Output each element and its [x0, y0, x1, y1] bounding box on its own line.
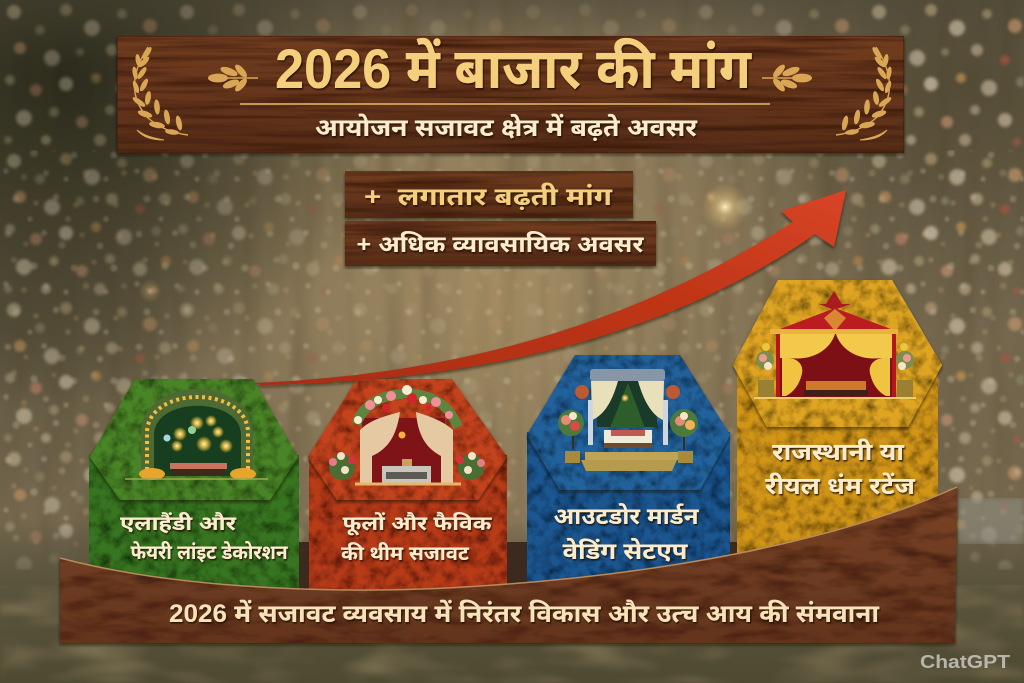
- icon: fairy-light arch: [125, 389, 268, 480]
- right flower column: [896, 343, 914, 397]
- icon: right laurel: [836, 46, 893, 140]
- icon: right sprig: [762, 63, 812, 93]
- label: outdoor modern: आउटडोर मार्डन: [554, 503, 699, 529]
- plaque: rising demand: + लगातार बढ़ती मांग: [364, 182, 613, 211]
- dark ground band behind cards: [299, 542, 737, 590]
- subtitle: आयोजन सजावट क्षेत्र में बढ़ते अवसर: [315, 113, 698, 142]
- label: royal stage: [765, 438, 916, 500]
- banner text: 2026 में सजावट व्यवसाय में निरंतर विकास और उत्च आय की संमवाना: [169, 599, 880, 628]
- bottom wood banner: [60, 487, 957, 643]
- growth arrow: [254, 190, 846, 385]
- right bouquet: [670, 409, 698, 450]
- panel: red card floral fabric: [308, 379, 507, 590]
- plaque: more business opportunities: [345, 221, 656, 266]
- plaque: more business opportunities: + अधिक व्यावसायिक अवसर: [356, 231, 644, 257]
- icon: left sprig: [208, 63, 258, 93]
- label: fairy lights: फेयरी लांइट डेकोरशन: [130, 540, 288, 564]
- label: flowers and fabric: [341, 511, 492, 565]
- left flowers: [329, 452, 356, 480]
- right flowers: [456, 452, 485, 480]
- panel: gold card royal stage: [733, 280, 942, 557]
- watermark: ChatGPT: [920, 652, 1010, 672]
- left bouquet: [558, 410, 584, 449]
- plaque: rising demand: [345, 171, 633, 218]
- title board: [117, 36, 904, 153]
- icon: left laurel: [131, 46, 188, 140]
- label: flowers and fabric: फूलों और फैविक: [342, 511, 492, 536]
- label: outdoor modern: [554, 503, 699, 564]
- label: royal stage: रीयल धंम रटेंज: [765, 472, 916, 500]
- label: fairy lights: [120, 511, 288, 564]
- label: fairy lights: एलाहैंडी और: [120, 511, 237, 535]
- panel: green card fairy lights: [89, 379, 299, 590]
- left flower column: [756, 343, 774, 397]
- title rule: [240, 103, 770, 105]
- label: royal stage: राजस्थानी या: [772, 438, 905, 466]
- panel: blue card outdoor modern: [527, 355, 730, 597]
- icon: royal tent stage: [756, 291, 914, 397]
- label: outdoor modern: वेडिंग सेटएप: [562, 538, 688, 564]
- main title: 2026 में बाजार की मांग: [275, 37, 752, 100]
- icon: floral curtain stage: [329, 385, 485, 484]
- icon: outdoor wedding pavilion: [558, 369, 698, 471]
- label: flowers and fabric: की थीम सजावट: [341, 541, 470, 565]
